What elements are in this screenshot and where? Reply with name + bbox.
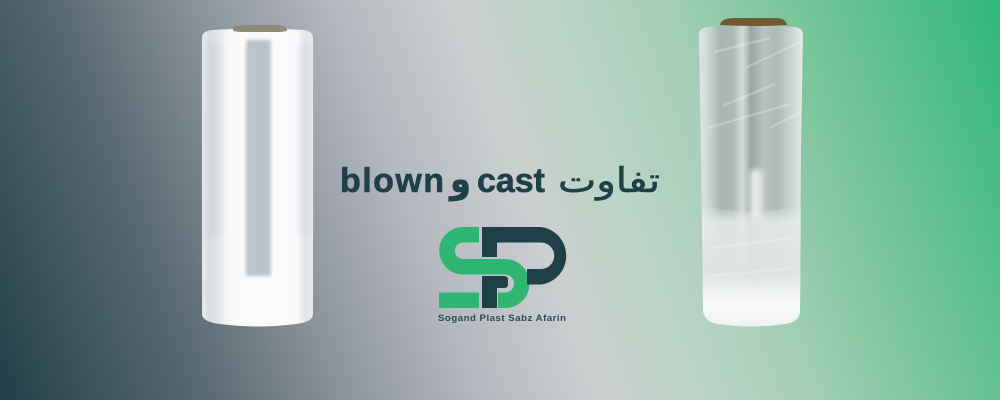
side shadows: [206, 42, 310, 237]
inner highlight: [750, 170, 762, 220]
letter P: [482, 227, 566, 308]
film streaks: [708, 38, 801, 276]
latin word: cast: cast: [477, 162, 545, 200]
product: blown stretch film roll: [202, 25, 313, 326]
company name: Sogand Plast Sabz Afarin: [438, 313, 566, 324]
product: cast stretch film roll: [699, 18, 803, 326]
central core shadow: [246, 40, 271, 276]
lower opaque wrap: [702, 205, 801, 326]
roll body: [699, 25, 803, 326]
letter S: [439, 235, 522, 300]
title: [340, 157, 660, 202]
arabic-script word: تفاوت: [558, 161, 660, 201]
roll core: [720, 18, 787, 26]
latin word: blown: blown: [340, 162, 444, 200]
roll body: [202, 28, 313, 326]
logo: SP: [438, 227, 566, 324]
roll core: [233, 25, 287, 32]
connector: va: و: [448, 157, 471, 202]
